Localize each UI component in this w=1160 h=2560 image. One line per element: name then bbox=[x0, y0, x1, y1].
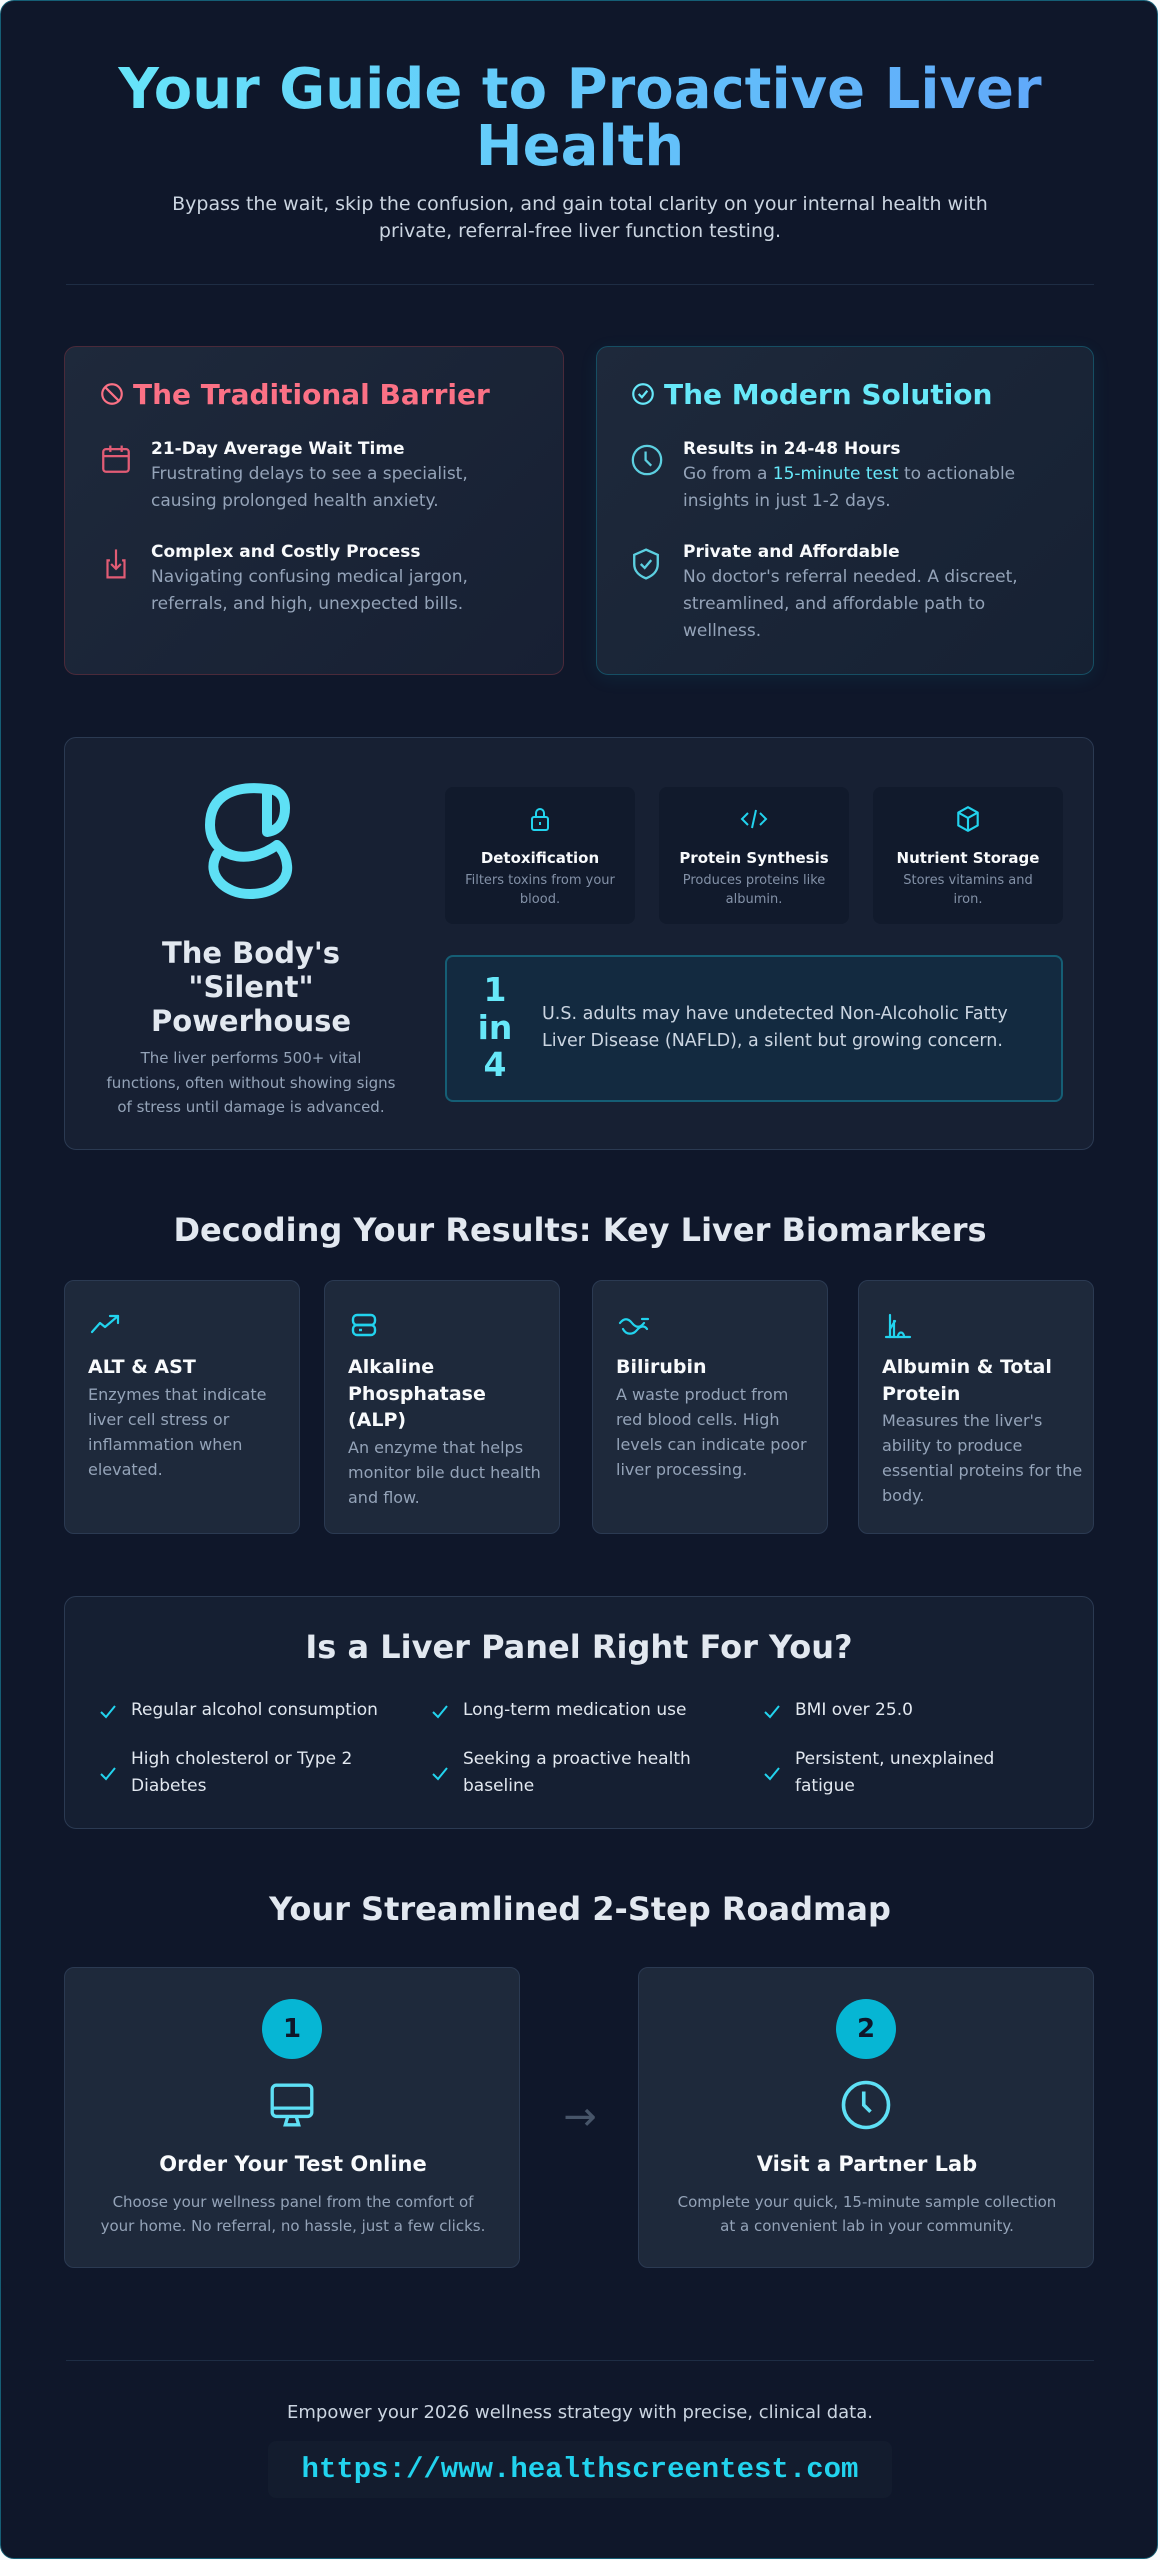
card: bilirubin: A waste product from red blood cells. High levels can indicate poor liver processing. bbox=[616, 1384, 807, 1478]
card: ALT & AST: Enzymes that indicate liver cell stress or inflammation when elevated. bbox=[88, 1384, 266, 1478]
item: wait time: 21-Day Average Wait Time bbox=[151, 439, 405, 459]
card: ALT & AST: ALT & AST bbox=[88, 1356, 196, 1378]
checklist bbox=[100, 1700, 994, 1796]
footer url bbox=[268, 2441, 892, 2498]
checklist: Seeking a proactive health baseline bbox=[463, 1749, 691, 1796]
card: ALP: Alkaline Phosphatase (ALP) bbox=[348, 1356, 486, 1431]
item: wait time bbox=[151, 439, 468, 511]
icon: shield bbox=[633, 548, 659, 580]
card: detoxification: Filters toxins from your blood. bbox=[465, 873, 615, 907]
panel: is a liver panel right for you bbox=[64, 1596, 1094, 1829]
card: bilirubin bbox=[592, 1280, 828, 1534]
icon: calendar bbox=[102, 446, 130, 473]
item: results: Go from a 15-minute test to actionable insights in just 1-2 days. bbox=[683, 464, 1015, 511]
callout: 1 in 4 stat: 4 bbox=[484, 1045, 506, 1084]
card: detoxification: Detoxification bbox=[481, 849, 599, 867]
heading: biomarkers: Decoding Your Results: Key Liver Biomarkers bbox=[173, 1211, 987, 1249]
panel: silent powerhouse bbox=[64, 737, 1094, 1150]
callout: 1 in 4 stat: in bbox=[478, 1008, 512, 1046]
checklist: High cholesterol or Type 2 Diabetes bbox=[131, 1749, 352, 1796]
item: private: Private and Affordable bbox=[683, 542, 900, 562]
heading: right for you: Is a Liver Panel Right For You? bbox=[305, 1628, 853, 1666]
callout: 1 in 4 stat: U.S. adults may have undetected Non-Alcoholic Fatty Liver Disease (NAFLD), a silent but growing concern. bbox=[542, 1004, 1008, 1051]
item: results bbox=[683, 439, 1015, 511]
card: albumin: Albumin & Total Protein bbox=[882, 1356, 1052, 1404]
card: protein synthesis: Produces proteins like albumin. bbox=[683, 873, 825, 907]
heading: roadmap: Your Streamlined 2-Step Roadmap bbox=[269, 1890, 891, 1928]
subtitle: Bypass the wait, skip the confusion, and gain total clarity on your internal health with private, referral-free liver function testing. bbox=[172, 193, 988, 242]
card: nutrient storage: Nutrient Storage bbox=[897, 849, 1039, 867]
card: albumin bbox=[858, 1280, 1094, 1534]
step 2: Complete your quick, 15-minute sample collection at a convenient lab in your community. bbox=[678, 2193, 1056, 2235]
icon: clock bbox=[842, 2080, 890, 2130]
card: ALT & AST bbox=[64, 1280, 300, 1534]
card: protein synthesis: Protein Synthesis bbox=[679, 849, 829, 867]
item: results: Results in 24-48 Hours bbox=[683, 439, 900, 459]
checklist: Long-term medication use bbox=[463, 1700, 686, 1720]
item: private: No doctor's referral needed. A discreet, streamlined, and affordable path to wellness. bbox=[683, 567, 1018, 641]
heading: modern solution: The Modern Solution bbox=[664, 378, 992, 411]
card: nutrient storage: Stores vitamins and iron. bbox=[903, 873, 1033, 907]
step 1: Order Your Test Online bbox=[159, 2152, 427, 2176]
heading: silent powerhouse: The Body's "Silent" Powerhouse bbox=[151, 936, 351, 1038]
step 2: 2 bbox=[857, 2014, 875, 2044]
panel: traditional barrier bbox=[64, 346, 564, 675]
step 1 bbox=[64, 1967, 520, 2268]
text: powerhouse description bbox=[106, 1049, 395, 1116]
item: complex process: Navigating confusing medical jargon, referrals, and high, unexpected bills. bbox=[151, 567, 468, 614]
step 1: 1 bbox=[283, 2014, 301, 2044]
card: ALP bbox=[324, 1280, 560, 1534]
footer text: Empower your 2026 wellness strategy with precise, clinical data. bbox=[287, 2402, 873, 2423]
footer url: https://www.healthscreentest.com bbox=[302, 2453, 858, 2486]
checklist: Persistent, unexplained fatigue bbox=[795, 1749, 994, 1796]
text: powerhouse description: functions, often without showing signs of stress until damage is advanced. bbox=[107, 1074, 395, 1116]
text: powerhouse description: The liver performs 500+ vital bbox=[141, 1049, 361, 1067]
callout: 1 in 4 stat: 1 bbox=[484, 970, 506, 1009]
panel: modern solution bbox=[596, 346, 1094, 675]
step 2 bbox=[638, 1967, 1094, 2268]
icon: liver bbox=[205, 783, 292, 899]
icon: clock bbox=[632, 444, 662, 476]
card: ALP: An enzyme that helps monitor bile duct health and flow. bbox=[348, 1438, 541, 1506]
callout: 1 in 4 stat bbox=[445, 955, 1063, 1102]
step 1: Choose your wellness panel from the comfort of your home. No referral, no hassle, just a few clicks. bbox=[101, 2193, 485, 2235]
checklist: Regular alcohol consumption bbox=[131, 1700, 378, 1720]
item: wait time: Frustrating delays to see a specialist, causing prolonged health anxiety. bbox=[151, 464, 468, 511]
card: protein synthesis bbox=[659, 787, 849, 924]
card: bilirubin: Bilirubin bbox=[616, 1356, 707, 1378]
card: albumin: Measures the liver's ability to produce essential proteins for the body. bbox=[882, 1411, 1082, 1505]
card: nutrient storage bbox=[873, 787, 1063, 924]
step 2: Visit a Partner Lab bbox=[757, 2152, 977, 2176]
checklist: BMI over 25.0 bbox=[795, 1700, 913, 1720]
item: complex process: Complex and Costly Process bbox=[151, 542, 421, 562]
item: complex process bbox=[151, 542, 468, 614]
icon: monitor bbox=[270, 2084, 314, 2126]
arrow: → bbox=[563, 2094, 597, 2140]
card: detoxification bbox=[445, 787, 635, 924]
heading: traditional barrier: The Traditional Barrier bbox=[133, 378, 490, 411]
title: Your Guide to Proactive Liver Health bbox=[118, 57, 1042, 179]
icon: download bbox=[106, 549, 126, 578]
